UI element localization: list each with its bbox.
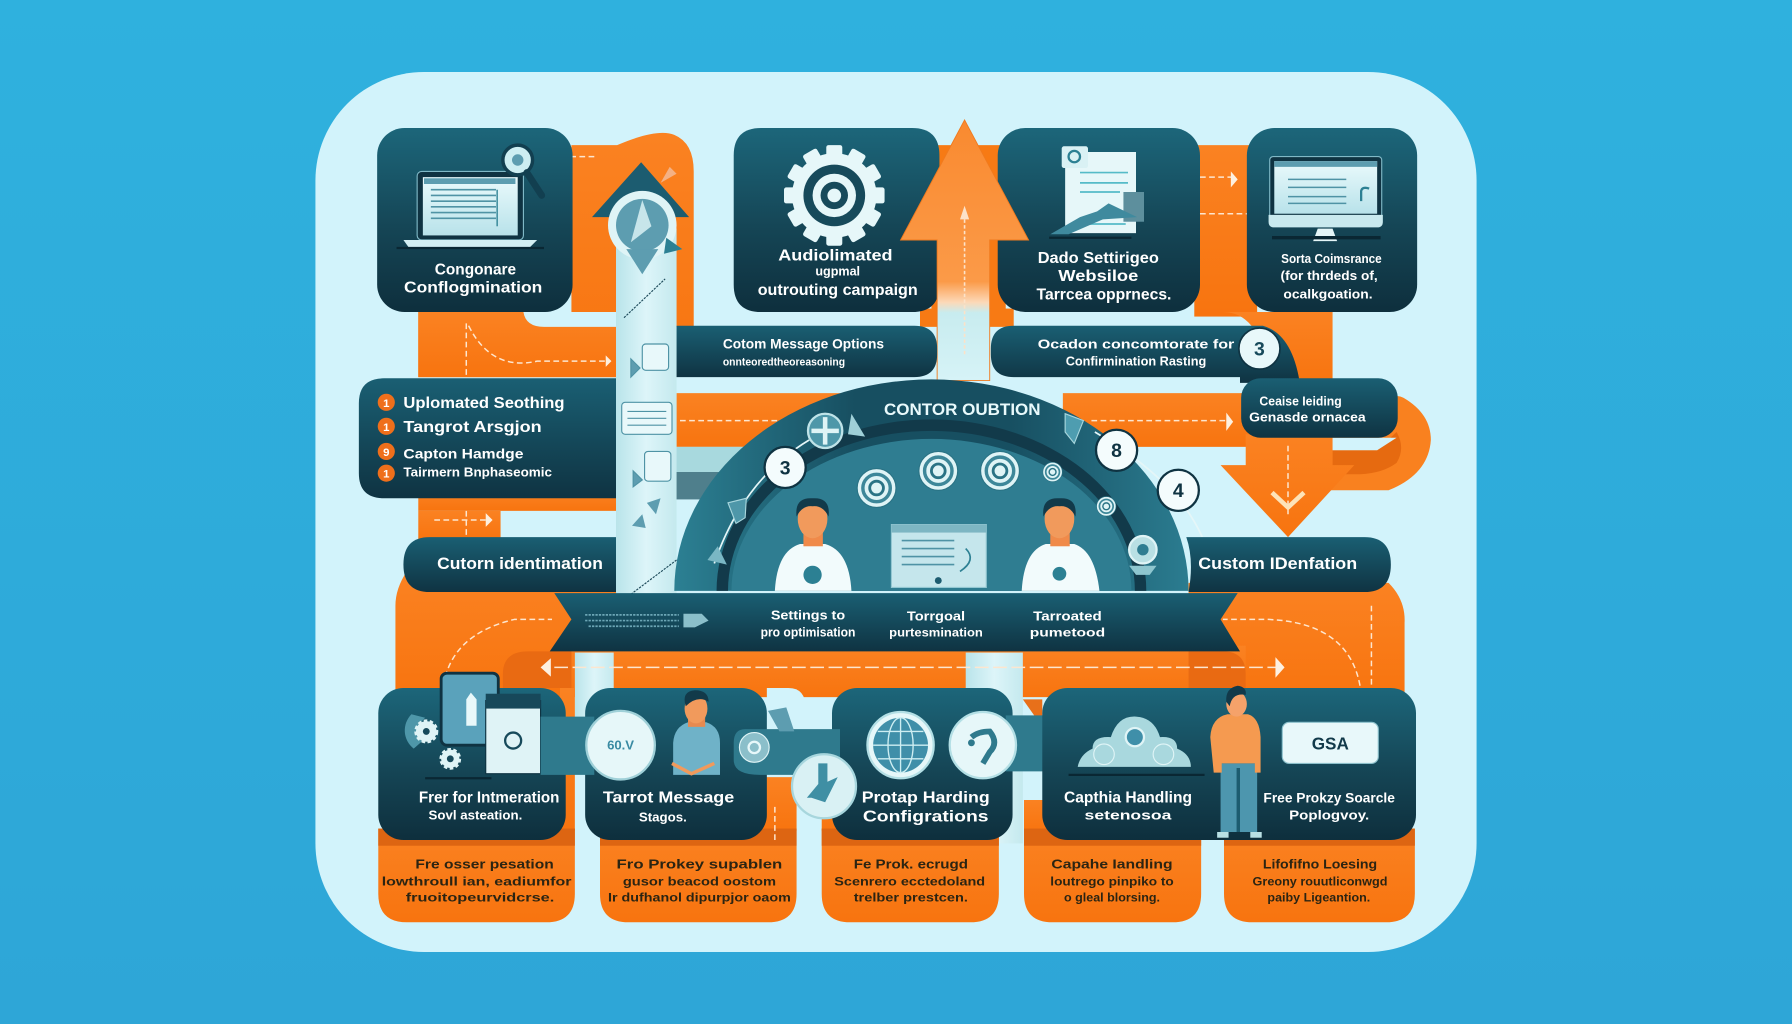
list items: Tairmern Bnphaseomic	[403, 466, 552, 480]
card: data settings	[998, 128, 1200, 312]
icon: gear target	[784, 145, 885, 246]
list items: 9	[383, 447, 389, 459]
screen	[891, 525, 986, 587]
orange flow paths	[395, 133, 1431, 697]
standing person	[1210, 686, 1262, 838]
list items: Tangrot Arsgjon	[403, 419, 542, 436]
card text: Frer for Intmeration	[419, 789, 559, 806]
caption text 5	[1253, 857, 1387, 905]
caption text 4: loutrego pinpiko to	[1050, 875, 1174, 889]
card text: Poplogvoy.	[1289, 808, 1369, 822]
badge 8	[1096, 430, 1137, 471]
arrow connector	[1006, 715, 1075, 771]
ribbon arrow	[585, 614, 709, 627]
caption text 4	[1050, 857, 1174, 905]
bar: custom identification left	[403, 537, 616, 592]
badge 4: 4	[1173, 480, 1184, 502]
card text: ocalkgoation.	[1283, 287, 1373, 301]
bar: custom identification right: Custom IDenfation	[1198, 554, 1357, 573]
bar: custom confirmation	[991, 326, 1299, 383]
caption text 3	[834, 857, 985, 905]
orange caption cards	[378, 688, 1415, 922]
card text: Audiolimated	[778, 248, 893, 265]
card text	[1037, 250, 1171, 303]
bar: custom identification left: Cutorn identimation	[437, 554, 603, 573]
central dome	[674, 379, 1202, 591]
bar: custom confirmation: Confirmination Rasting	[1066, 354, 1206, 369]
card: monitor	[1247, 128, 1417, 312]
badge 3: 3	[780, 457, 791, 479]
down arrow chevron	[1272, 493, 1304, 507]
caption text 3: Fe Prok. ecrugd	[854, 857, 968, 872]
icon: coin	[586, 711, 655, 779]
ribbon text: Torrgoal	[907, 609, 965, 624]
person left	[775, 498, 851, 591]
list items	[383, 395, 565, 481]
list badges	[378, 394, 395, 482]
ribbon text: purtesmination	[889, 626, 983, 640]
box: custom listing: Ceaise Ieiding	[1259, 395, 1342, 409]
card text: Configrations	[863, 809, 989, 826]
badge 3 top right	[1239, 328, 1280, 369]
badge 4	[1158, 470, 1199, 511]
striped bands	[677, 447, 745, 499]
person	[672, 690, 720, 775]
caption text 3: Scenrero ecctedoland	[834, 875, 985, 889]
GSA tag	[1282, 722, 1378, 763]
card: proxy handling	[734, 688, 1075, 840]
ribbon text: Settings to	[771, 607, 845, 622]
card text: Dado Settirigeo	[1038, 250, 1159, 267]
card: configuration	[377, 128, 573, 312]
icon: laptop	[397, 145, 544, 248]
card text: setenosoa	[1085, 808, 1173, 822]
badge icon	[1129, 536, 1157, 575]
small dome icons	[707, 414, 1083, 565]
list items: 1	[383, 422, 390, 434]
card text: Tarrot Message	[603, 789, 735, 806]
connector tag	[739, 707, 794, 762]
bar: custom message options: Cotom Message Options	[723, 337, 884, 353]
card text: Conflogmination	[404, 280, 542, 297]
box: custom listing: Genasde ornacea	[1249, 411, 1367, 425]
icon: down arrow	[792, 754, 856, 818]
badge 3	[765, 447, 806, 488]
connector ribbon	[541, 717, 594, 775]
card text: Stagos.	[639, 811, 687, 825]
ribbon	[550, 593, 1240, 651]
caption text 1: Fre osser pesation	[415, 857, 554, 872]
card text: outrouting campaign	[758, 282, 918, 299]
list card	[359, 378, 616, 498]
card text: Sovl asteation.	[429, 808, 522, 822]
caption text 4: Capahe Iandling	[1051, 857, 1173, 872]
list items: 1	[383, 398, 390, 410]
caption text 1	[382, 857, 572, 905]
card text	[1064, 789, 1395, 822]
card text: (for thrdeds of,	[1281, 269, 1378, 283]
ribbon text: pro optimisation	[761, 625, 855, 640]
dome track	[714, 432, 1202, 563]
bar: custom confirmation: Ocadon concomtorate for	[1038, 337, 1234, 352]
main panel	[315, 72, 1477, 952]
card text: Capthia Handling	[1064, 789, 1192, 806]
vertical pipe	[616, 229, 677, 594]
card text: Tarrcea opprnecs.	[1037, 286, 1171, 303]
big orange up arrow	[901, 120, 1029, 381]
card: message stages	[541, 688, 767, 840]
list items: 1	[383, 469, 390, 481]
card: captcha and proxy	[1042, 686, 1416, 840]
caption top shadows	[378, 829, 1415, 846]
icon: coin: 60.V	[607, 738, 634, 753]
card text	[404, 261, 542, 297]
badge 3 top right: 3	[1254, 338, 1265, 360]
dashed flow lines	[434, 157, 1371, 840]
ribbon text: Tarroated	[1033, 609, 1102, 624]
pipe document icons	[622, 279, 677, 594]
card: interaction	[378, 673, 566, 840]
caption text 4: o gleal blorsing.	[1064, 891, 1160, 905]
icon: globe	[867, 712, 934, 778]
card text: Congonare	[435, 261, 517, 278]
caption text 2	[608, 857, 791, 905]
pipe top arrow	[592, 162, 689, 274]
flow arrowheads	[486, 171, 1285, 678]
spiral icons	[857, 451, 1116, 516]
badge 8: 8	[1111, 440, 1122, 462]
card text: ugpmal	[815, 264, 860, 278]
caption text 5: paiby Ligeantion.	[1267, 891, 1370, 905]
icon: monitor	[1269, 157, 1383, 241]
card text	[862, 789, 990, 826]
icon: link	[950, 712, 1016, 778]
card text: Free Prokzy Soarcle	[1263, 790, 1395, 805]
caption text 5: Lifofifno Loesing	[1263, 857, 1377, 872]
bar: custom message options: onnteoredtheoreasoning	[723, 357, 845, 369]
caption text 1: lowthroull ian, eadiumfor	[382, 875, 572, 889]
connector ribbon	[734, 729, 840, 775]
card: automated outreach	[734, 128, 939, 312]
icon: gears and devices	[405, 673, 541, 778]
list items: Capton Hamdge	[403, 446, 524, 462]
bar: custom message options	[677, 326, 937, 377]
connector pipes	[575, 653, 1042, 843]
icon: cloud	[1069, 717, 1205, 775]
caption text 3: trelber prestcen.	[854, 891, 968, 905]
caption text 5: Greony rouutliconwgd	[1253, 875, 1387, 889]
ribbon text	[761, 607, 1105, 640]
ribbon text: pumetood	[1030, 626, 1105, 640]
card text: Websiloe	[1058, 268, 1139, 285]
card text: Protap Harding	[862, 789, 990, 806]
GSA tag: GSA	[1312, 734, 1349, 754]
card text	[419, 789, 559, 822]
card text	[1281, 252, 1382, 301]
card text: Sorta Coimsrance	[1281, 252, 1382, 266]
card text	[758, 248, 918, 299]
caption text 2: Ir dufhanol dipurpjor oaom	[608, 891, 791, 905]
caption text 1: fruoitopeurvidcrse.	[406, 891, 554, 905]
box: custom listing	[1241, 378, 1398, 438]
person right	[1022, 498, 1099, 591]
caption text 2: gusor beacod oostom	[623, 875, 776, 889]
icon: document	[1049, 146, 1144, 238]
card text	[603, 789, 735, 825]
bar: custom identification right	[1186, 537, 1391, 592]
dome title: CONTOR OUBTION	[884, 400, 1041, 419]
caption text 2: Fro Prokey supablen	[617, 857, 782, 872]
list items: Uplomated Seothing	[403, 395, 565, 412]
